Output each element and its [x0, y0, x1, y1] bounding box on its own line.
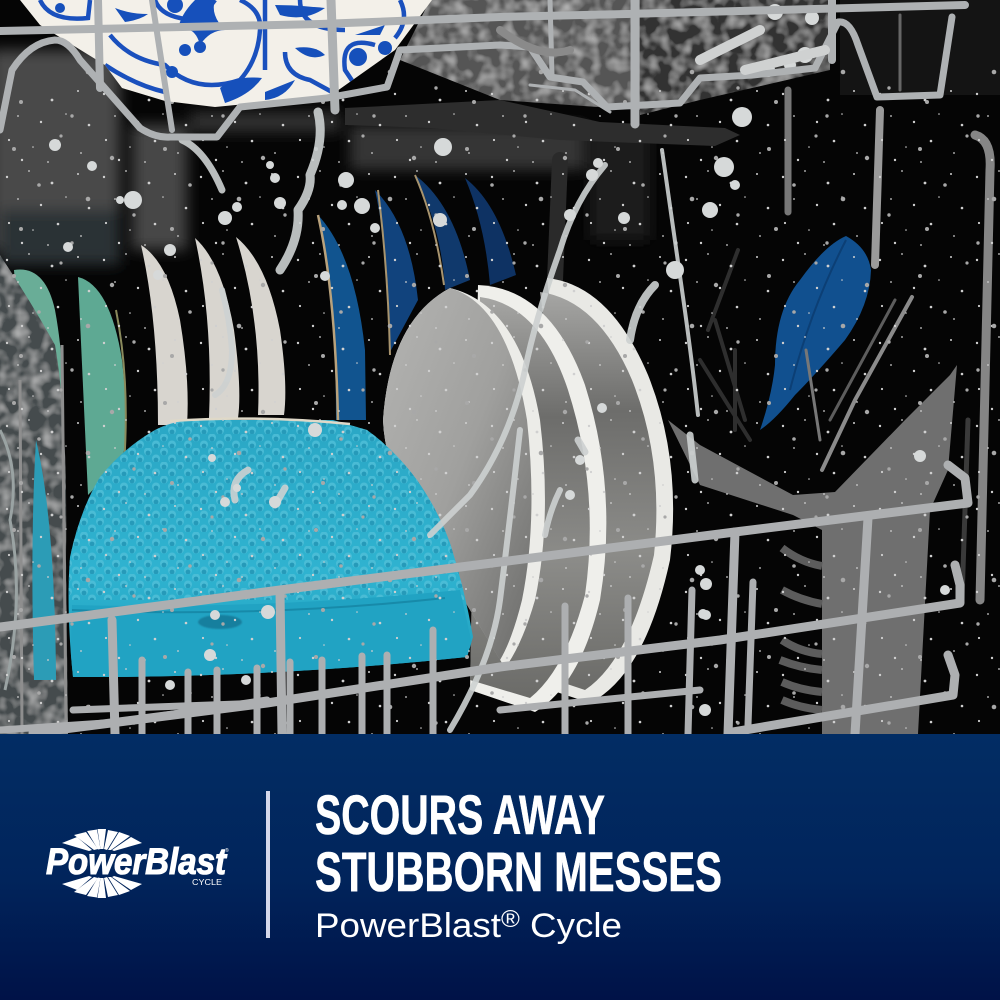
bowl [60, 410, 490, 680]
logo rays bottom [62, 876, 142, 898]
PowerBlast logo [46, 829, 229, 898]
subheading: Cycle [520, 907, 622, 945]
white-rimmed plates [141, 237, 285, 425]
spray arm [345, 100, 740, 146]
cutlery basket [668, 365, 957, 734]
blue plates [318, 175, 516, 420]
bottom banner [0, 734, 1000, 1000]
back plate [547, 278, 674, 699]
green plates [14, 270, 126, 495]
logo rays top [62, 829, 142, 851]
cutlery [700, 250, 912, 470]
logo registered mark: ® [225, 847, 229, 854]
photo: dishwasher interior [0, 0, 1000, 734]
upper rack [0, 0, 965, 137]
front plate [383, 288, 545, 668]
upper rack water area [400, 0, 640, 110]
lower rack [0, 465, 968, 734]
large white plates [383, 278, 673, 712]
divider [266, 791, 270, 938]
large water drops [49, 4, 950, 716]
medium water specks [0, 60, 1000, 734]
water streams [182, 112, 698, 730]
top plate [15, 0, 435, 110]
heading [315, 783, 722, 903]
glass at left [0, 255, 68, 734]
tiny water specks [0, 90, 1000, 734]
heading line 2: STUBBORN MESSES [315, 840, 722, 903]
heading line 1: SCOURS AWAY [315, 783, 605, 846]
blue spatula [760, 236, 871, 430]
left tub wall [0, 50, 650, 265]
logo wordmark: PowerBlast [46, 841, 227, 882]
subheading: ® [501, 906, 520, 933]
middle plate [470, 285, 606, 712]
logo cycle label: CYCLE [192, 877, 222, 887]
subheading: PowerBlast [315, 907, 490, 945]
rear wall rails [555, 90, 990, 600]
